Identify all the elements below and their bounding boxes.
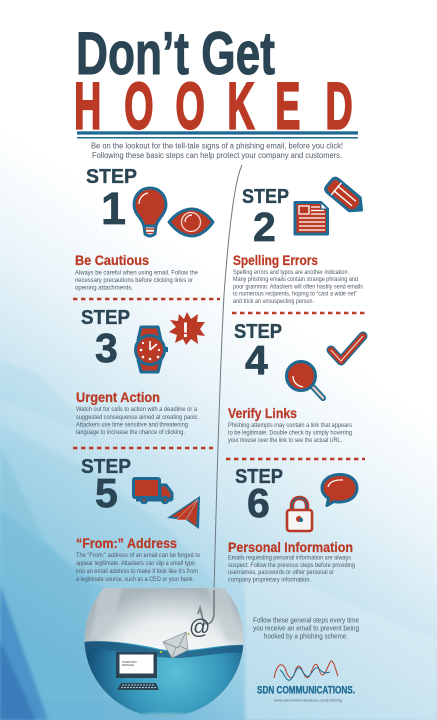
body: Be Cautious: necessary precautions before clicking links or [75, 277, 193, 284]
bowl glass [84, 588, 243, 717]
body: Urgent Action: Attackers use time sensitive and threatening [76, 422, 188, 428]
body: Be Cautious [75, 270, 198, 292]
logo wordmark: SDN COMMUNICATIONS. [257, 684, 355, 696]
panel: step 2 [233, 176, 367, 305]
logo waveform [274, 661, 338, 680]
step 5 label: STEP [81, 456, 131, 478]
body: Verify Links: to be legitimate. Double check by simply hovering [228, 430, 352, 436]
step 5 number: 5 [95, 470, 118, 516]
green dot [187, 633, 190, 635]
step 4 label: STEP [234, 321, 282, 343]
body: Spelling Errors: Spelling errors and typos are another indication. [233, 269, 349, 276]
closing text: Follow these general steps every time [253, 616, 359, 624]
panel: step 3 [76, 307, 205, 436]
heading: Spelling Errors: Spelling Errors [233, 253, 318, 268]
icon: light bulb [134, 188, 166, 236]
heading: Urgent Action: Urgent Action [76, 390, 160, 405]
body: Spelling Errors: and trick an unsuspecting person. [233, 298, 314, 305]
icon: computer: SUSPICIOUS [122, 661, 137, 664]
step 3 label: STEP [81, 307, 130, 329]
icon: at sign: @ [189, 616, 210, 639]
icon: pencil [324, 176, 367, 217]
closing text: hooked by a phishing scheme. [264, 632, 348, 640]
title rules [77, 131, 358, 138]
title: HOOKED: HOOKED [74, 70, 353, 143]
body: Be Cautious: Always be careful when using email. Follow the [75, 270, 198, 276]
icon: check mark [331, 336, 363, 361]
step 1 number: 1 [101, 183, 126, 234]
step 6 label: STEP [235, 466, 283, 488]
heading: Be Cautious: Be Cautious [75, 253, 149, 268]
closing text: you receive an email to prevent being [253, 624, 359, 632]
icon: alert burst: ! [182, 319, 189, 342]
illustration: fish bowl [84, 586, 244, 719]
intro text [91, 142, 343, 160]
intro text: Be on the lookout for the tell-tale signs of a phishing email, before you click! [91, 142, 343, 150]
step 2 number: 2 [253, 204, 276, 250]
body: Spelling Errors: poor grammar. Attackers will often hastily send emails [233, 284, 363, 290]
body: Personal Information [228, 554, 355, 584]
body: Verify Links: your mouse over the link to see the actual URL. [228, 437, 342, 444]
panel: step 1 [75, 166, 213, 292]
body: Personal Information: Emails requesting personal information are always [228, 554, 351, 562]
body: Spelling Errors: Many phishing emails contain strange phrasing and [233, 276, 358, 283]
heading: Personal Information: Personal Information [228, 540, 353, 555]
body: Spelling Errors [233, 269, 363, 305]
logo: SDN Communications [257, 661, 355, 702]
icon: fish hook [198, 590, 214, 624]
body: Urgent Action: language to increase the chance of clicking. [76, 429, 185, 436]
icon: speech bubble [322, 474, 357, 506]
body: From Address: The “From:” address of an email can be forged to [76, 552, 200, 559]
body: Personal Information: usernames, passwords or other personal or [228, 569, 334, 576]
icon: magnifying glass [286, 362, 323, 398]
icon: delivery truck [134, 478, 172, 503]
water [84, 641, 244, 719]
fishing line [214, 165, 242, 592]
heading: From Address: “From:” Address [76, 536, 177, 551]
body: Urgent Action: Watch out for calls to action with a deadline or a [76, 406, 197, 413]
panel: step 6 [228, 466, 357, 584]
body: Verify Links [228, 422, 352, 444]
step 2 label: STEP [242, 186, 289, 208]
step 3 number: 3 [95, 325, 118, 371]
closing text [253, 616, 359, 640]
body: Personal Information: suspect. Follow the previous steps before providing [228, 562, 355, 569]
body: From Address [76, 552, 200, 583]
body: From Address: appear legitimate. Attackers can slip a small typo [76, 560, 195, 567]
body: Verify Links: Phishing attempts may contain a link that appears [228, 422, 352, 429]
icon: document [295, 202, 328, 234]
icon: padlock [287, 498, 312, 531]
title: Don't Get: Don’t Get [76, 20, 275, 87]
intro text: Following these basic steps can help protect your company and customers. [92, 151, 342, 160]
icon: computer: MESSAGE [122, 664, 134, 667]
step 4 number: 4 [245, 337, 268, 383]
body: From Address: a legitimate source, such as a CEO or your bank. [76, 576, 194, 583]
logo url: www.sdncommunications.com/phishing [274, 698, 342, 702]
body: From Address: into an email address to make it look like it’s from [76, 568, 198, 575]
icon: paper envelope [163, 632, 188, 658]
body: Be Cautious: opening attachments. [75, 284, 133, 292]
body: Spelling Errors: to numerous recipients, hoping to “cast a wide net” [233, 290, 357, 298]
body: Urgent Action [76, 406, 199, 436]
icon: computer [116, 652, 159, 690]
step 1 label: STEP [86, 166, 137, 188]
icon: eye [169, 209, 213, 236]
icon: watch [136, 327, 168, 372]
body: Urgent Action: suggested consequence aimed at creating panic. [76, 414, 199, 421]
step 6 number: 6 [247, 480, 270, 526]
icon: paper plane [167, 496, 200, 529]
panel: step 4 [228, 321, 363, 444]
green dot [160, 651, 162, 653]
body: Personal Information: company proprietary information. [228, 576, 311, 584]
heading: Verify Links: Verify Links [228, 406, 297, 421]
panel: step 5 [76, 456, 200, 583]
